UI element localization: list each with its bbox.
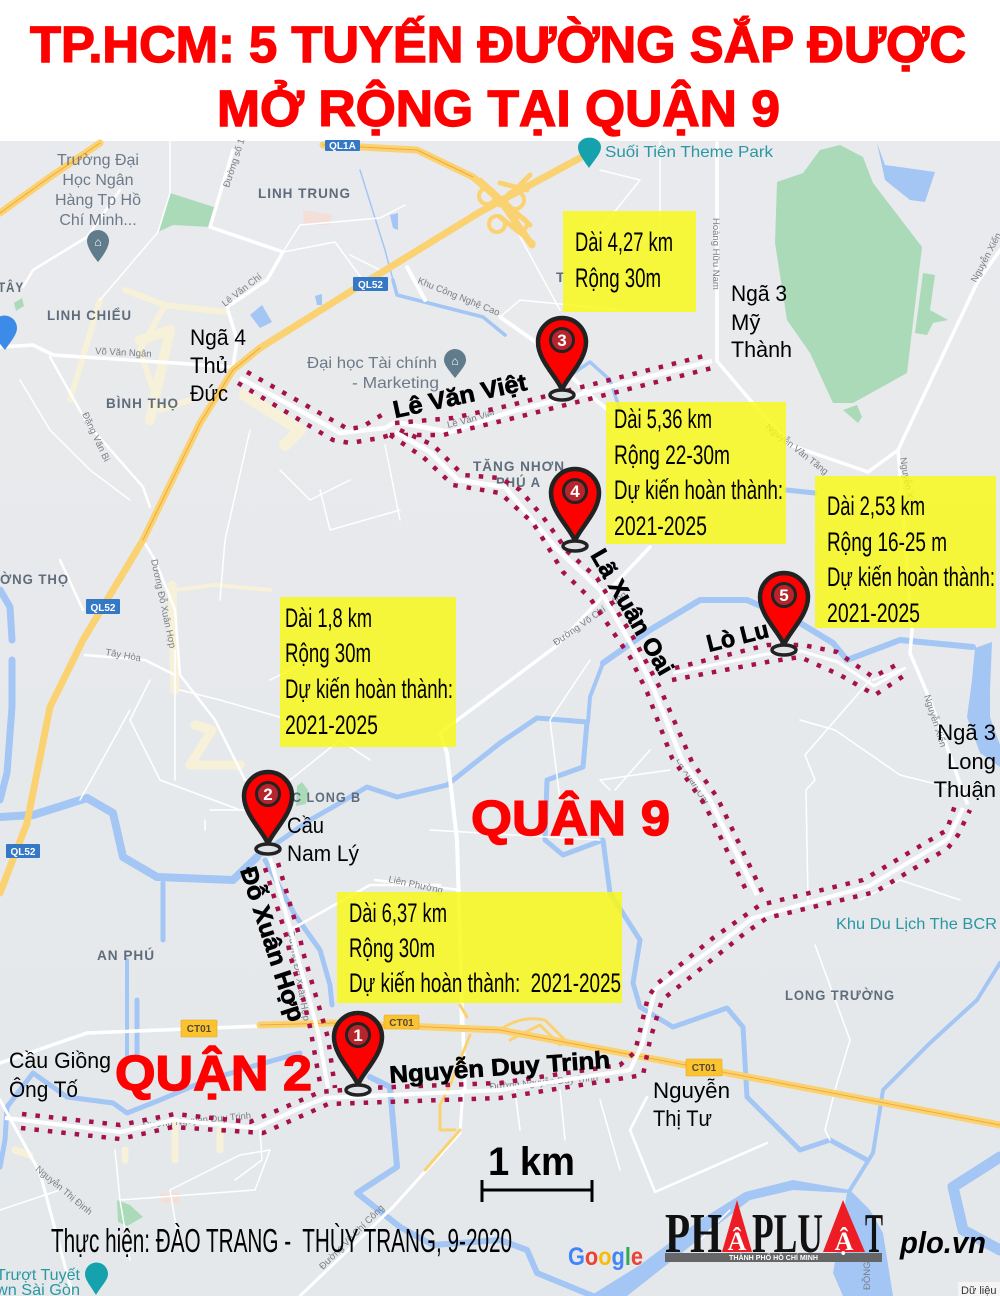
area labels: LINH CHIỂU xyxy=(47,306,132,323)
area labels: LONG TRƯỜNG xyxy=(785,986,895,1003)
credit: Thực hiện: ĐÀO TRANG - THÙY TRANG, 9-2020 xyxy=(51,1222,512,1259)
label: Nguyễn Thị Tư xyxy=(653,1078,730,1131)
street names: Đường Võ Chí Công xyxy=(317,1203,387,1272)
pin 2: 2 xyxy=(263,785,273,804)
label: Cầu Giồng Ông Tố xyxy=(9,1048,111,1102)
parks xyxy=(14,145,948,1226)
POI icons xyxy=(0,138,601,1295)
route shields xyxy=(6,140,722,1076)
label: Cầu Nam Lý: Nam Lý xyxy=(287,841,359,866)
info box: route 2 xyxy=(280,597,456,747)
road name: Đỗ Xuân Hợp: Đỗ Xuân Hợp xyxy=(234,863,311,1025)
label: Ngã 3 Long Thuận: Ngã 3 xyxy=(937,720,996,745)
street names: Võ Văn Ngân xyxy=(95,346,152,360)
area labels: ỜNG THỌ xyxy=(0,570,69,587)
road name: Lò Lu: Lò Lu xyxy=(704,616,772,658)
info box: route 5 xyxy=(815,476,996,628)
road: Đỗ Xuân Hợp xyxy=(265,858,335,1088)
area labels: LINH TRUNG xyxy=(258,185,351,201)
label: Ngã 3 Mỹ Thành: Mỹ xyxy=(731,310,760,335)
info box: route 5: 2021-2025 xyxy=(827,598,920,628)
street names: ĐỒNG xyxy=(861,1262,873,1290)
street names: Hoàng Hữu Nam xyxy=(710,218,721,290)
label: Ngã 3 Long Thuận xyxy=(934,720,996,802)
street names: Lã Xuân Oai xyxy=(673,756,711,806)
road: Nguyễn Duy Trinh xyxy=(5,805,970,1139)
logo: Pháp Luật: Â xyxy=(728,1227,747,1256)
area labels: TĂNG NHƠN xyxy=(473,458,565,474)
info box: route 4: Dài 5,36 km xyxy=(614,404,712,434)
route shields: QL1A xyxy=(329,141,356,152)
street names: Nguyễn Xiển xyxy=(897,457,917,512)
info box: route 3: Dài 4,27 km xyxy=(575,227,673,257)
place labels: Chí Minh... xyxy=(59,212,137,229)
map attribution xyxy=(958,1282,1000,1296)
route shields: CT01 xyxy=(389,1018,414,1029)
info box: route 5: Dài 2,53 km xyxy=(827,491,925,521)
road: Lã Xuân Oai xyxy=(390,430,765,898)
pin 3: 3 xyxy=(557,331,567,350)
info box: route 1 xyxy=(337,892,622,1003)
place labels: Suối Tiên Theme Park xyxy=(605,144,774,161)
POI icons: ⌂ xyxy=(94,235,102,249)
street names: Tây Hòa xyxy=(104,647,142,664)
title: TP.HCM: 5 TUYẾN ĐƯỜNG SẮP ĐƯỢC xyxy=(30,15,966,73)
info box: route 3: Rộng 30m xyxy=(575,263,661,293)
label: Cầu Giồng Ông Tố: Ông Tố xyxy=(9,1077,78,1102)
street names: Lê Văn Việt xyxy=(446,408,497,431)
street names: Đường Võ Chí Công xyxy=(551,590,629,648)
road: Lê Văn Việt and Đường 3 base xyxy=(238,355,712,443)
street names: Nguyễn Xiển xyxy=(921,694,948,749)
label: Ngã 3 Mỹ Thành: Ngã 3 xyxy=(731,281,787,306)
urban areas xyxy=(15,290,300,1160)
area labels: T xyxy=(556,269,566,285)
street names: Đường Nguyễn Duy Trinh xyxy=(142,1111,252,1131)
label: Nguyễn Thị Tư: Nguyễn xyxy=(653,1078,730,1103)
label: Nguyễn Thị Tư: Thị Tư xyxy=(653,1106,712,1131)
info box: route 5: Rộng 16-25 m xyxy=(827,527,947,557)
pin 5 xyxy=(760,573,808,655)
info box: route 4: Dự kiến hoàn thành: xyxy=(614,475,783,505)
info box: route 1: Dự kiến hoàn thành: 2021-2025 xyxy=(349,968,621,998)
label: Ngã 4 Thủ Đức: Thủ xyxy=(190,353,228,378)
scale bar: 1 km xyxy=(488,1140,575,1184)
label: Ngã 3 Long Thuận: Long xyxy=(947,749,996,774)
logo: Pháp Luật: Ậ xyxy=(835,1227,854,1256)
place labels: Học Ngân xyxy=(62,172,134,189)
road name: Lã Xuân Oai: Lã Xuân Oai xyxy=(585,544,679,680)
route shields: QL52 xyxy=(90,603,116,614)
place labels: - Marketing xyxy=(352,375,439,392)
label: Ngã 3 Long Thuận: Thuận xyxy=(934,777,996,802)
label: Ngã 4 Thủ Đức xyxy=(190,325,246,406)
route shields: QL52 xyxy=(10,847,36,858)
street names: Nguyễn Thị Định xyxy=(33,1164,94,1218)
POI icons: ⌂ xyxy=(451,354,459,368)
pin 4 xyxy=(551,469,599,551)
google logo: Google xyxy=(568,1243,643,1271)
info box: route 3 xyxy=(563,211,696,312)
street names: Lê Văn Chí xyxy=(220,271,265,309)
label: Ngã 3 Mỹ Thành: Thành xyxy=(731,337,792,362)
place labels: Khu Du Lịch The BCR xyxy=(836,916,997,933)
title xyxy=(30,15,966,137)
street names: Đặng Văn Bi xyxy=(79,411,112,464)
pin 3 xyxy=(538,318,586,400)
road: Lò Lu xyxy=(672,645,905,695)
pin 1: 1 xyxy=(353,1026,363,1045)
info box: route 2: 2021-2025 xyxy=(285,710,378,740)
road name: Nguyễn Duy Trinh: Nguyễn Duy Trinh xyxy=(388,1046,611,1089)
label: Ngã 3 Mỹ Thành xyxy=(731,281,792,362)
street names: Đường số 1 xyxy=(221,137,247,189)
road name: Lê Văn Việt: Lê Văn Việt xyxy=(391,369,529,424)
logo: Pháp Luật: PH xyxy=(665,1203,722,1265)
scale bar xyxy=(482,1140,592,1202)
district label: Quận 9: QUẬN 9 xyxy=(471,791,670,846)
area labels: C LONG B xyxy=(292,789,361,805)
info box: route 2: Rộng 30m xyxy=(285,638,371,668)
info box: route 4 xyxy=(606,402,786,544)
text: T xyxy=(865,1203,883,1265)
logo: Pháp Luật: PLU xyxy=(752,1203,823,1265)
area labels xyxy=(0,185,895,1003)
street names: Đường Đỗ Xuân Hợp xyxy=(285,931,312,1022)
pin 4: 4 xyxy=(570,482,580,501)
area labels: BÌNH THỌ xyxy=(106,395,179,411)
route shields: CT01 xyxy=(187,1024,212,1035)
pin 2 xyxy=(244,772,292,854)
highways xyxy=(0,143,1000,1170)
place labels: Hàng Tp Hồ xyxy=(55,192,141,209)
pin 5: 5 xyxy=(779,586,789,605)
route shields: CT01 xyxy=(692,1063,717,1074)
route shields: QL52 xyxy=(358,280,383,291)
label: Ngã 4 Thủ Đức: Ngã 4 xyxy=(190,325,246,350)
info box: route 2: Dài 1,8 km xyxy=(285,603,372,633)
place labels: Đại học Tài chính xyxy=(307,355,437,372)
district label: Quận 2: QUẬN 2 xyxy=(115,1046,312,1101)
logo: Pháp Luật xyxy=(665,1200,883,1265)
place labels: Trường Đại xyxy=(57,152,139,169)
street names: Nguyễn Văn Tăng xyxy=(763,422,830,477)
label: Cầu Nam Lý xyxy=(287,813,359,866)
info box: route 4: Rộng 22-30m xyxy=(614,440,730,470)
label: Cầu Giồng Ông Tố: Cầu Giồng xyxy=(9,1048,111,1073)
street names: Khu Công Nghệ Cao xyxy=(416,276,501,319)
logo: Pháp Luật: THÀNH PHỐ HỒ CHÍ MINH xyxy=(729,1252,818,1262)
label: Ngã 4 Thủ Đức: Đức xyxy=(190,381,228,406)
info box: route 4: 2021-2025 xyxy=(614,511,707,541)
area labels: AN PHÚ xyxy=(97,946,155,963)
info box: route 2: Dự kiến hoàn thành: xyxy=(285,674,453,704)
info box: route 1: Rộng 30m xyxy=(349,933,435,963)
site name: plo.vn xyxy=(899,1225,986,1260)
info box: route 1: Dài 6,37 km xyxy=(349,898,447,928)
pin 1 xyxy=(334,1013,382,1095)
street names: Liên Phường xyxy=(387,874,444,896)
street names: Dương Đỗ Xuân Hợp xyxy=(148,558,178,649)
street names: Đường Nguyễn Duy Trinh xyxy=(489,1073,599,1093)
area labels: PHÚ A xyxy=(496,473,541,490)
title: MỞ RỘNG TẠI QUẬN 9 xyxy=(217,79,780,137)
label: Cầu Nam Lý: Cầu xyxy=(287,813,324,838)
